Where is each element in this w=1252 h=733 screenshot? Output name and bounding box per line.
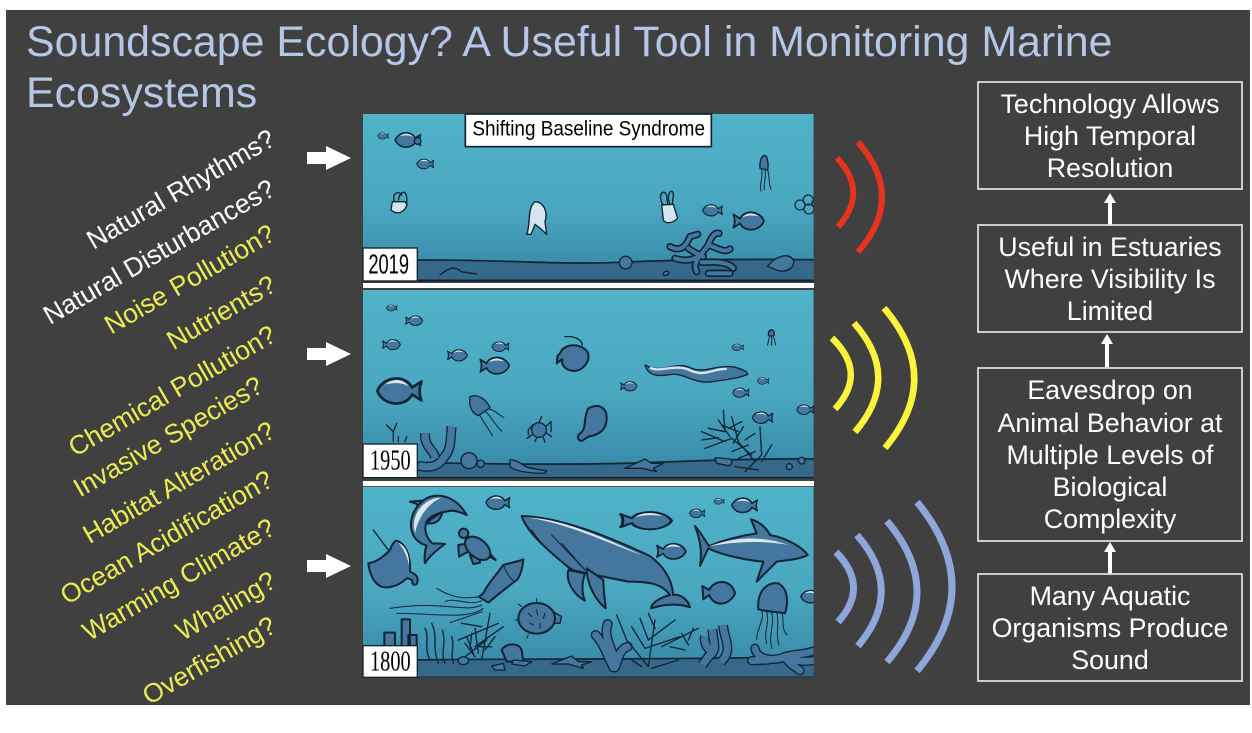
sound waves: 1800 (blue)	[836, 502, 952, 671]
pufferfish	[515, 598, 562, 638]
box: eavesdrop: Animal Behavior at	[998, 408, 1223, 438]
box: eavesdrop: Complexity	[1044, 504, 1177, 534]
heading: Shifting Baseline Syndrome: Shifting Baseline Syndrome	[472, 117, 705, 141]
year label: 2019: 2019	[368, 249, 409, 280]
year label: 1950	[363, 444, 417, 478]
stressor: invasive species: Invasive Species?	[68, 370, 268, 503]
sound waves: 1950 (yellow)	[832, 308, 914, 448]
squid	[390, 559, 523, 623]
box: estuaries	[978, 225, 1242, 332]
dolphin	[410, 496, 467, 563]
arrow: to 2019 panel	[307, 146, 351, 170]
box: eavesdrop	[978, 368, 1242, 541]
whale	[522, 516, 690, 608]
manta ray	[368, 530, 418, 587]
box: technology: High Temporal	[1024, 121, 1196, 151]
white strips between panels	[363, 283, 814, 288]
illustration panel: 2019	[363, 114, 821, 282]
shark	[695, 519, 808, 582]
arrow: to 1950 panel	[307, 342, 351, 366]
year label: 1950: 1950	[370, 445, 411, 476]
illustration panel: 1800	[363, 487, 823, 678]
stressor: chemical pollution: Chemical Pollution?	[63, 319, 281, 462]
box: technology: Resolution	[1047, 153, 1173, 183]
seaweed and corals	[384, 613, 817, 671]
title: Ecosystems	[26, 69, 257, 117]
round fish	[702, 582, 735, 604]
year label: 2019	[363, 248, 417, 281]
box: estuaries: Limited	[1067, 296, 1153, 326]
box: technology: Technology Allows	[1001, 89, 1219, 119]
natural factor: rhythms: Natural Rhythms?	[81, 123, 280, 255]
turtle	[458, 529, 496, 565]
rotated list of stressor questions	[38, 123, 281, 711]
year label: 1800: 1800	[370, 647, 411, 678]
box: eavesdrop: Multiple Levels of	[1006, 440, 1214, 470]
stressor: habitat alteration: Habitat Alteration?	[77, 415, 280, 549]
stressor: ocean acidification: Ocean Acidification?	[55, 464, 278, 610]
arrow: to 1800 panel	[307, 554, 351, 578]
box: aquatic organisms	[978, 574, 1242, 681]
box: eavesdrop: Biological	[1053, 472, 1167, 502]
arrow: up to eavesdrop box	[1104, 542, 1116, 574]
natural factor: disturbances: Natural Disturbances?	[38, 173, 280, 330]
stressor: whaling: Whaling?	[170, 565, 281, 646]
stressor: nutrients: Nutrients?	[161, 269, 281, 356]
box: aquatic organisms: Many Aquatic	[1030, 581, 1190, 611]
title: Soundscape Ecology? A Useful Tool in Monitoring Marine	[26, 18, 1112, 66]
arrow: up to technology box	[1104, 193, 1116, 225]
heading: Shifting Baseline Syndrome	[465, 114, 711, 147]
box: eavesdrop: Eavesdrop on	[1027, 375, 1193, 405]
stressor: warming climate: Warming Climate?	[77, 512, 280, 647]
arrow: up to estuaries box	[1101, 334, 1113, 367]
box: aquatic organisms: Sound	[1071, 645, 1149, 675]
box: technology	[978, 82, 1242, 189]
box: aquatic organisms: Organisms Produce	[992, 613, 1228, 643]
stressor: noise pollution: Noise Pollution?	[99, 218, 280, 340]
jellyfish	[757, 583, 787, 648]
icon: coral	[670, 233, 733, 273]
icon: tube sponges	[419, 427, 452, 467]
box: estuaries: Useful in Estuaries	[998, 232, 1222, 262]
sound waves: 2019 (red)	[837, 142, 882, 252]
illustration panel: 1950	[363, 290, 815, 478]
stressor: overfishing: Overfishing?	[137, 610, 281, 711]
box: estuaries: Where Visibility Is	[1005, 264, 1215, 294]
